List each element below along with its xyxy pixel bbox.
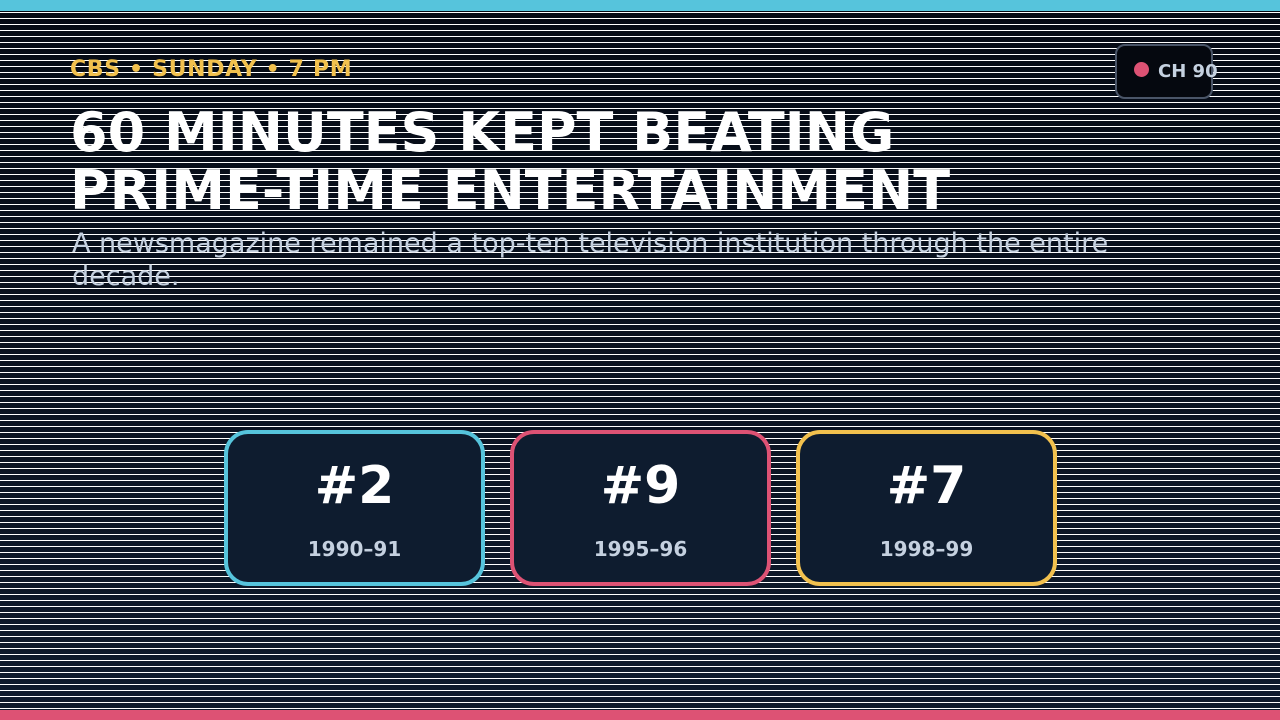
title — [70, 101, 950, 222]
bottom accent bar — [0, 710, 1280, 720]
subtitle: A newsmagazine remained a top-ten television institution through the entire — [72, 228, 1108, 259]
subtitle: decade. — [72, 261, 179, 292]
title: PRIME-TIME ENTERTAINMENT — [70, 159, 950, 222]
icon: live dot — [1134, 62, 1149, 77]
top accent bar — [0, 0, 1280, 11]
subtitle — [72, 228, 1108, 292]
title: 60 MINUTES KEPT BEATING — [70, 101, 894, 164]
channel badge — [1115, 44, 1213, 99]
channel text: CH 90 — [1158, 61, 1218, 82]
eyebrow label: CBS • SUNDAY • 7 PM — [70, 57, 352, 82]
rank number: #7 — [887, 456, 966, 516]
season: 1995–96 — [594, 537, 687, 561]
season: 1998–99 — [880, 537, 973, 561]
rank number: #2 — [315, 456, 394, 516]
card: 1990-91 rank — [224, 430, 485, 586]
rank number: #9 — [601, 456, 680, 516]
card: 1998-99 rank — [796, 430, 1057, 586]
season: 1990–91 — [308, 537, 401, 561]
card: 1995-96 rank — [510, 430, 771, 586]
